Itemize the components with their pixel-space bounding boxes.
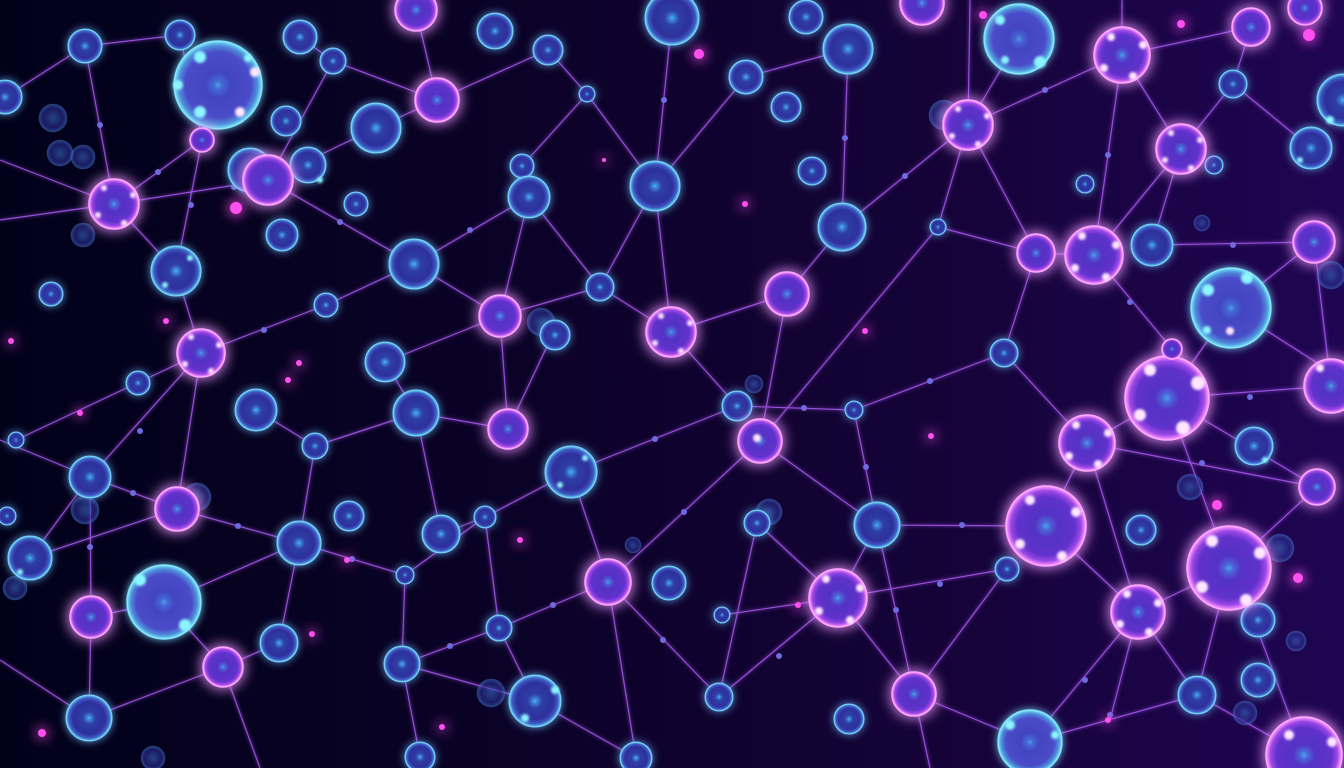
line beads bbox=[87, 87, 1253, 718]
